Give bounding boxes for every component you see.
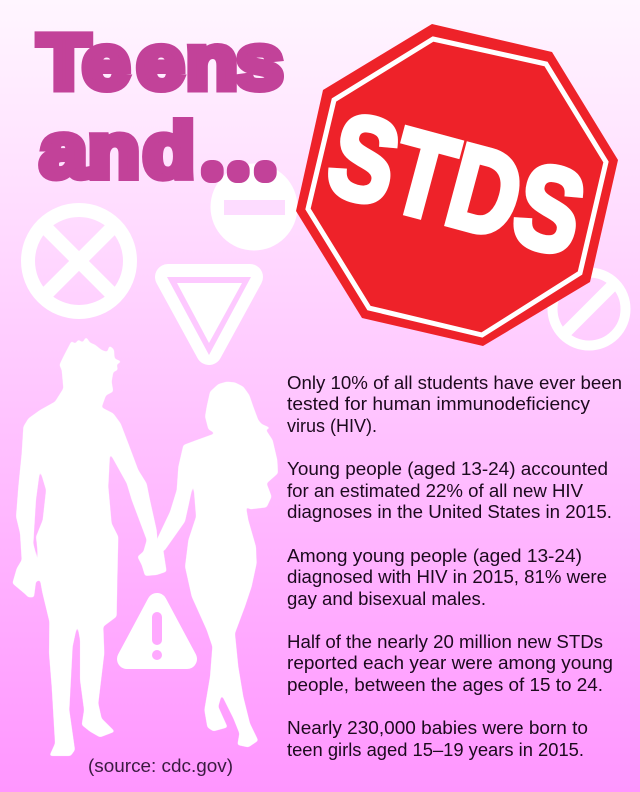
text: new STDs: reported each year were among young bbox=[287, 653, 613, 673]
title: ... bbox=[210, 156, 268, 178]
text: teen births: Nearly 230,000 babies were born to bbox=[287, 718, 588, 738]
text: HIV testing: tested for human immunodeficiency bbox=[287, 394, 590, 414]
text: gay and bisexual males: diagnosed with HIV in 2015, 81% were bbox=[287, 567, 607, 587]
text: teen births bbox=[287, 718, 588, 760]
icon: prohibition circle sign bbox=[552, 272, 626, 346]
text: new HIV diagnoses bbox=[287, 459, 612, 522]
text: HIV testing bbox=[287, 373, 622, 436]
text: gay and bisexual males: Among young people (aged 13-24) bbox=[287, 546, 582, 566]
silhouette: man bbox=[12, 337, 167, 756]
title: Teens bbox=[38, 20, 283, 106]
text: new HIV diagnoses: for an estimated 22% of all new HIV bbox=[287, 481, 583, 501]
text: HIV testing: Only 10% of all students have ever been bbox=[287, 373, 622, 393]
icon: crossed circle sign bbox=[28, 210, 130, 312]
text: gay and bisexual males: gay and bisexual males. bbox=[287, 589, 486, 609]
title: and bbox=[40, 109, 195, 194]
icon: yield triangle sign bbox=[167, 277, 251, 355]
text: new STDs: people, between the ages of 15 to 24. bbox=[287, 675, 603, 695]
text: new HIV diagnoses: diagnoses in the United States in 2015. bbox=[287, 502, 612, 522]
text: HIV testing: virus (HIV). bbox=[287, 416, 377, 436]
text: new STDs bbox=[287, 632, 613, 695]
text: gay and bisexual males bbox=[287, 546, 607, 609]
title bbox=[38, 20, 283, 194]
source note: (source: cdc.gov) bbox=[88, 756, 233, 776]
icon: warning triangle bbox=[127, 603, 187, 660]
stop sign: STDS bbox=[296, 24, 618, 346]
text: new HIV diagnoses: Young people (aged 13-24) accounted bbox=[287, 459, 608, 479]
silhouette: woman bbox=[157, 382, 278, 747]
text: new STDs: Half of the nearly 20 million new STDs bbox=[287, 632, 603, 652]
icon: no entry sign bbox=[210, 164, 298, 250]
text: teen births: teen girls aged 15–19 years in 2015. bbox=[287, 740, 584, 760]
